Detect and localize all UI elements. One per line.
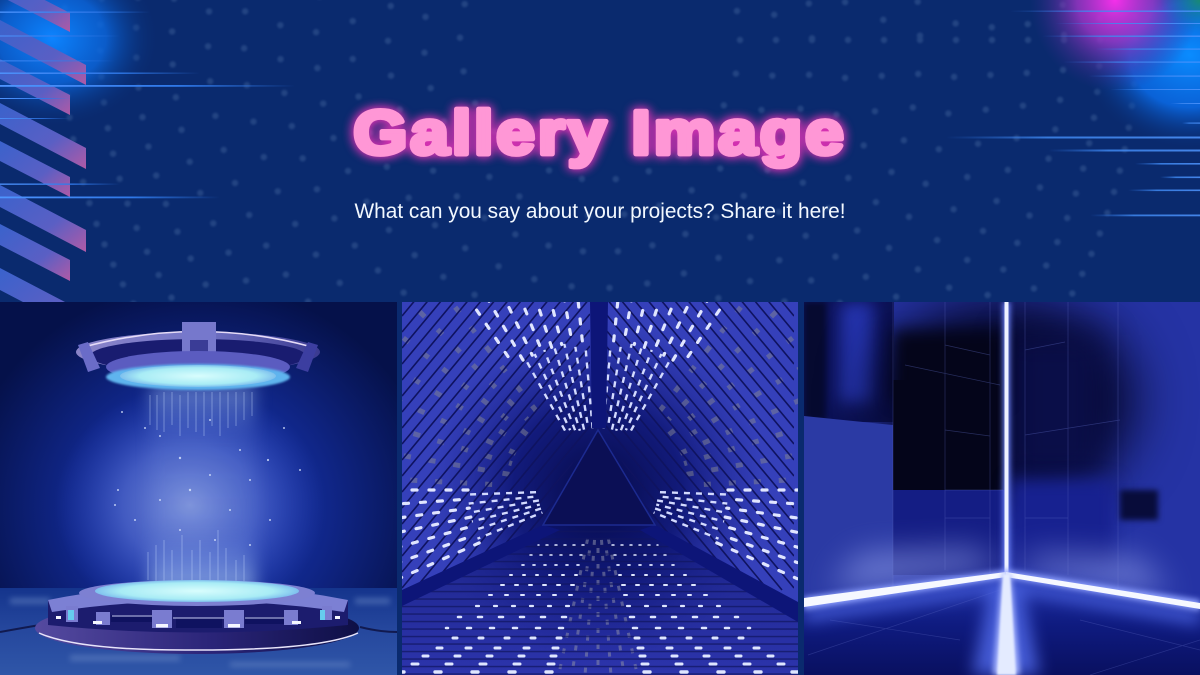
floor highlights bbox=[10, 598, 390, 667]
bright LED rays: inner bbox=[468, 344, 728, 539]
room base bbox=[864, 302, 1200, 603]
dim floor rays bbox=[560, 539, 636, 675]
glow: top right bbox=[1038, 0, 1200, 136]
sparkles bbox=[114, 411, 301, 546]
subtitle: What can you say about your projects? Share it here! bbox=[354, 199, 846, 223]
floor LED rows: right bbox=[612, 545, 798, 672]
wall panel seams bbox=[893, 302, 1120, 590]
bright LED rays: outer bbox=[397, 290, 799, 579]
light streaks: left bbox=[0, 12, 295, 198]
centre shading bbox=[445, 337, 752, 630]
dot pattern background bbox=[66, 0, 1134, 302]
right wall slats bbox=[606, 302, 794, 590]
central triangle bbox=[543, 430, 655, 525]
fog bbox=[68, 404, 310, 584]
tunnel walls bbox=[402, 302, 798, 602]
light beam bbox=[148, 385, 255, 590]
floor glow bbox=[804, 578, 1200, 675]
title: Gallery Image bbox=[353, 97, 847, 167]
floor bbox=[0, 588, 397, 675]
diagonal stripes bbox=[0, 0, 86, 335]
dim LED rays bbox=[402, 306, 798, 487]
corner beams bbox=[402, 302, 798, 622]
floor bbox=[804, 574, 1200, 675]
panel: image 2, LED triangle tunnel bbox=[402, 302, 798, 675]
light streaks: right bbox=[946, 10, 1200, 216]
floor LED rows: left bbox=[402, 545, 584, 672]
glow: top left bbox=[0, 0, 144, 114]
backdrop bbox=[0, 302, 397, 588]
tunnel floor bbox=[402, 548, 798, 674]
neon lines bbox=[804, 302, 1200, 675]
lower platform bbox=[0, 580, 397, 654]
left wall slats bbox=[402, 302, 590, 588]
panel: image 1, floating platform bbox=[0, 302, 397, 675]
panel: header banner bbox=[0, 0, 1200, 302]
wall glow bbox=[830, 550, 1170, 595]
panel: image 3, neon corner room bbox=[804, 300, 1200, 675]
upper ring assembly bbox=[76, 322, 320, 390]
floor seams bbox=[808, 590, 1200, 675]
back wall colour blocks bbox=[804, 300, 1158, 598]
floor slats bbox=[402, 525, 798, 675]
